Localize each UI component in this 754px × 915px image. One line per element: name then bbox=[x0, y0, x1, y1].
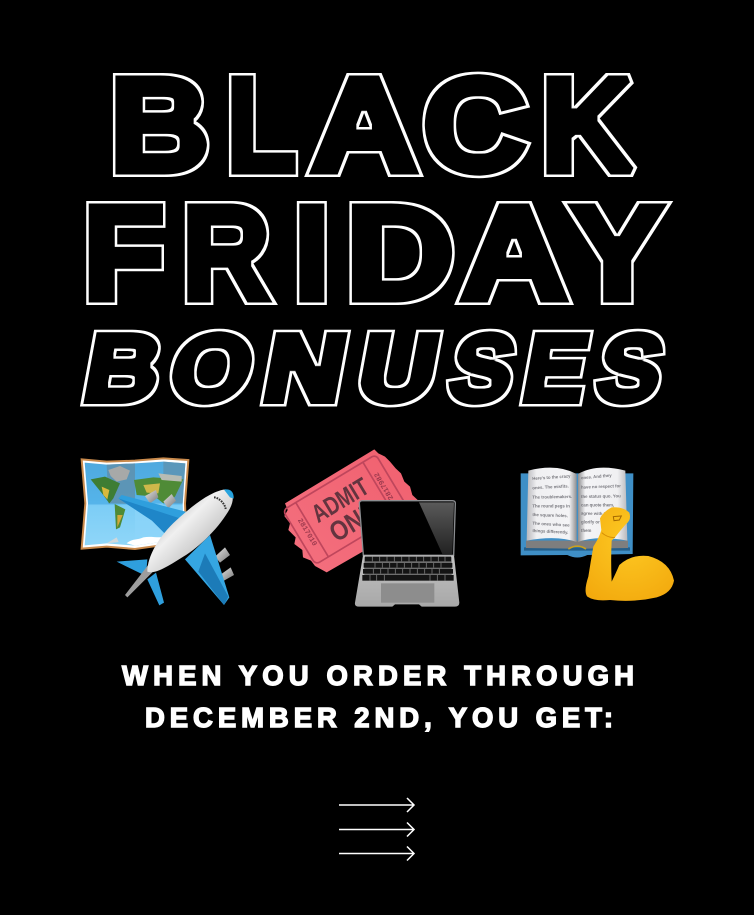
title line: BONUSES: U bbox=[350, 316, 447, 422]
icon: admission ticket and laptop bbox=[284, 449, 460, 607]
book page text: The ones who see bbox=[532, 521, 570, 528]
book page text: have no respect for bbox=[581, 483, 621, 490]
book bbox=[521, 468, 633, 558]
ticket: ONE bbox=[324, 495, 382, 548]
title line: FRIDAY: F bbox=[83, 179, 164, 328]
laptop bbox=[355, 501, 459, 607]
subheading bbox=[121, 660, 634, 733]
book page text: the status quo. You bbox=[581, 493, 621, 499]
map bbox=[82, 458, 188, 549]
ticket: 2817982 bbox=[373, 470, 396, 501]
flexed arm bbox=[586, 507, 674, 601]
title line: FRIDAY: I bbox=[294, 179, 330, 328]
title line: BLACK: K bbox=[541, 51, 634, 200]
title line: BONUSES: O bbox=[162, 316, 262, 422]
subheading line 1: WHEN YOU ORDER THROUGH bbox=[122, 660, 634, 691]
book page text: the square holes. bbox=[532, 512, 568, 518]
ticket: 2817010 bbox=[295, 517, 318, 548]
title line: BONUSES: E bbox=[515, 316, 597, 422]
arrow 1 bbox=[339, 798, 414, 812]
title bbox=[76, 51, 674, 422]
title line: FRIDAY: R bbox=[182, 179, 270, 328]
book page text: things differently. bbox=[532, 528, 568, 535]
title line: BONUSES bbox=[76, 316, 672, 422]
book page text: can quote them, bbox=[581, 503, 614, 508]
title line: BLACK: L bbox=[226, 51, 297, 200]
airplane bbox=[117, 489, 234, 605]
title line: FRIDAY: Y bbox=[570, 179, 664, 328]
title line: BONUSES: S bbox=[442, 316, 523, 422]
title line: BONUSES: B bbox=[76, 316, 170, 422]
book page text: glorify or vilify bbox=[581, 519, 611, 524]
book page text: agree with them, bbox=[581, 511, 615, 516]
title line: FRIDAY: D bbox=[346, 179, 454, 328]
book page text: The round pegs in bbox=[532, 503, 570, 508]
book page text: ones. And they bbox=[581, 473, 612, 480]
book page text: The troublemakers. bbox=[532, 494, 572, 500]
title line: FRIDAY: A bbox=[460, 179, 568, 328]
title line: BONUSES: S bbox=[589, 316, 672, 422]
ticket bbox=[283, 449, 418, 572]
subheading line 2: DECEMBER 2ND, YOU GET: bbox=[145, 702, 613, 733]
icon: open book and flexed biceps bbox=[520, 468, 674, 601]
title line: BLACK: C bbox=[423, 51, 527, 200]
book page text: them bbox=[581, 528, 591, 533]
arrow 2 bbox=[339, 822, 414, 836]
book page text: ones. The misfits. bbox=[532, 483, 569, 490]
book page text: Here's to the crazy bbox=[532, 473, 571, 481]
title line: BLACK: A bbox=[310, 51, 418, 200]
title line: BLACK: B bbox=[110, 51, 210, 200]
title line: BONUSES: N bbox=[256, 316, 355, 422]
book page text bbox=[532, 473, 621, 535]
icon: map and airplane bbox=[80, 457, 234, 606]
arrows bbox=[339, 798, 415, 861]
arrow 3 bbox=[339, 846, 414, 860]
ticket text: ADMIT bbox=[307, 472, 374, 528]
